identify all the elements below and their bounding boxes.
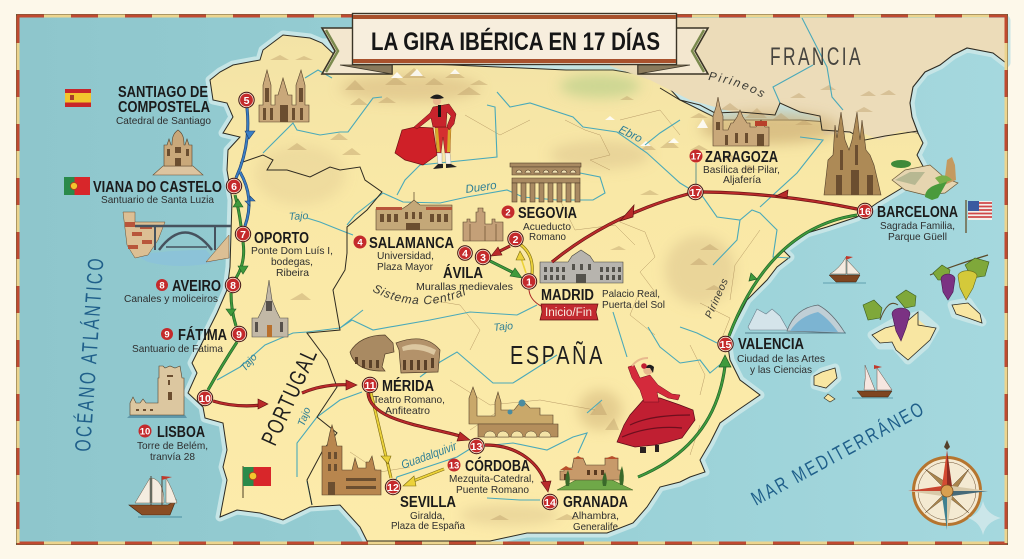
label: Fatima: FÁTIMA	[178, 325, 227, 344]
stop 9: 9	[236, 329, 242, 341]
label: Merida: Anfiteatro	[385, 405, 430, 417]
icon: Seville Giralda and cathedral	[322, 425, 381, 495]
stop 5: 5	[244, 95, 250, 107]
label: Merida: Teatro Romano,	[373, 394, 445, 406]
route: Segovia to Avila	[491, 246, 510, 256]
label: Lisboa: Torre de Belém,	[137, 440, 208, 452]
river label: Tajo north: Tajo	[289, 210, 309, 223]
label: Segovia	[502, 205, 577, 243]
island: Menorca halo	[952, 302, 982, 322]
icon: grapes left	[863, 290, 916, 341]
icon: Park Guell	[891, 157, 958, 200]
stop 4: 4	[462, 248, 468, 260]
route: Santiago to Viana	[236, 108, 255, 178]
route: Fatima to Lisbon	[208, 342, 237, 390]
stop 14	[542, 494, 558, 510]
label: Merida	[373, 376, 445, 417]
route: to Merida	[302, 380, 357, 393]
label: Cordoba	[448, 456, 534, 496]
icon: Fatima basilica	[252, 280, 288, 337]
island: Ibiza halo	[815, 368, 837, 388]
label: Sevilla: SEVILLA	[400, 494, 456, 511]
icon: Santa Luzia sanctuary	[153, 130, 203, 175]
stop 10: 10	[199, 393, 211, 405]
label: Lisboa: LISBOA	[157, 424, 205, 441]
icon: USA flag	[966, 200, 992, 233]
bodice and arms	[628, 365, 680, 402]
range label: Pirineos east: Pirineos	[703, 276, 731, 320]
label: Zaragoza: ZARAGOZA	[705, 149, 778, 166]
icon: Segovia aqueduct	[510, 163, 581, 202]
cape	[395, 127, 437, 165]
range label: Pirineos north: Pirineos	[708, 72, 764, 97]
route: Madrid to Zaragoza	[552, 194, 688, 262]
label: Santiago de Compostela: COMPOSTELA	[118, 99, 210, 116]
label: Zaragoza: Basílica del Pilar,	[703, 164, 780, 176]
label: Segovia: SEGOVIA	[518, 205, 577, 222]
label: Oporto	[251, 230, 333, 279]
icon: grapes right	[930, 255, 989, 300]
stop 7: 7	[240, 229, 246, 241]
label: Aveiro	[124, 278, 221, 305]
country label: España: ESPAÑA	[510, 340, 605, 370]
island: Formentera	[824, 394, 835, 402]
label: Madrid: MADRID	[541, 287, 594, 304]
shoes	[433, 164, 457, 169]
stockings	[437, 153, 451, 164]
stop 8	[225, 277, 241, 293]
border: Portugal and Spain	[240, 155, 382, 505]
label: Santiago de Compostela: Catedral de Santiago	[116, 115, 211, 127]
administrative borders	[350, 110, 760, 472]
label: Fatima	[132, 325, 227, 355]
icon: Zaragoza basilica	[713, 97, 769, 146]
route: green coast north	[233, 195, 243, 226]
route: Barcelona to Valencia	[729, 215, 857, 336]
label: Aveiro: Canales y moliceiros	[124, 293, 218, 305]
label: Valencia: Ciudad de las Artes	[737, 353, 825, 365]
route: Avila to Madrid	[490, 261, 522, 278]
icon: Santiago cathedral	[259, 70, 309, 122]
border: Spain and France	[660, 88, 918, 140]
label: Cordoba: Mezquita-Catedral,	[449, 473, 534, 485]
label: Cordoba: CÓRDOBA	[465, 456, 530, 475]
label: Zaragoza	[690, 149, 780, 186]
route: Cordoba to Seville	[403, 469, 444, 486]
label: Barcelona	[877, 204, 958, 243]
label: Lisboa	[137, 424, 208, 463]
island: Mallorca	[872, 312, 936, 360]
icon: Cordoba mosque and Roman bridge	[469, 387, 558, 437]
icon: flamenco dancer	[617, 358, 695, 453]
terrain shading	[255, 74, 840, 525]
stop 11	[362, 377, 378, 393]
stop 12: 12	[387, 482, 399, 494]
label: Segovia: 2	[505, 208, 511, 218]
label: Cordoba: 13	[449, 460, 459, 472]
stop 7	[235, 226, 251, 242]
label: Granada: Alhambra,	[572, 510, 619, 522]
label: Salamanca: Universidad,	[377, 250, 434, 262]
label: Salamanca	[354, 235, 454, 273]
river label: Tajo Portugal west: Tajo	[238, 351, 260, 374]
stop 3: 3	[480, 252, 486, 264]
trousers	[435, 127, 451, 153]
icon: compass rose	[908, 440, 988, 530]
stop 4	[457, 245, 473, 261]
title: LA GIRA IBÉRICA EN 17 DÍAS	[371, 27, 660, 56]
label: Oporto: OPORTO	[254, 230, 309, 247]
head	[433, 97, 441, 105]
icon: Alhambra	[557, 456, 633, 490]
icon: bullfighter with cape	[395, 94, 457, 169]
stop 13: 13	[471, 441, 482, 453]
rivers	[217, 18, 843, 505]
stop markers	[197, 92, 873, 510]
route: Zaragoza to Barcelona	[703, 190, 857, 209]
stop 14: 14	[544, 497, 556, 509]
route: Viana to Oporto	[240, 172, 255, 226]
label: Avila: ÁVILA	[443, 263, 483, 282]
stop 6	[226, 178, 242, 194]
stop 2: 2	[513, 234, 519, 246]
label: Granada: GRANADA	[563, 494, 628, 511]
river label: Ebro: Ebro	[617, 124, 644, 146]
stop 17: 17	[690, 187, 701, 199]
stop 2	[507, 231, 524, 247]
label: Lisboa: tranvía 28	[150, 451, 195, 463]
label: Salamanca: SALAMANCA	[369, 235, 454, 252]
island: Menorca	[952, 303, 982, 323]
label: Lisboa: 10	[140, 426, 150, 438]
label: Oporto: Ribeira	[276, 267, 309, 279]
shoes	[640, 445, 659, 453]
label: Barcelona: Sagrada Familia,	[880, 220, 955, 232]
route: Valencia to south	[638, 355, 731, 477]
label: Salamanca: 4	[357, 238, 363, 248]
route: Merida to Cordoba	[368, 393, 470, 441]
routes	[208, 108, 857, 492]
icon: Sagrada Familia	[824, 112, 881, 195]
land: Iberian peninsula	[188, 35, 925, 541]
label: Madrid: Puerta del Sol	[602, 299, 665, 311]
label: Valencia	[737, 336, 825, 376]
stop 5	[238, 92, 255, 108]
label: Segovia: Acueducto	[523, 221, 571, 233]
stop 10	[197, 390, 213, 406]
label: Segovia: Romano	[529, 231, 566, 243]
label: Barcelona: Parque Güell	[888, 231, 947, 243]
stop 8: 8	[230, 280, 236, 292]
icon: Spain flag	[65, 89, 91, 107]
label: Salamanca: Plaza Mayor	[377, 261, 433, 273]
stop 15	[717, 336, 734, 352]
label: Zaragoza: 17	[691, 152, 701, 162]
label: Viana do Castelo: VIANA DO CASTELO	[93, 179, 222, 196]
label: Merida: MÉRIDA	[382, 376, 434, 395]
label: Avila: Murallas medievales	[416, 281, 513, 293]
sea label: Oceano Atlantico: OCÉANO ATLÁNTICO	[70, 255, 109, 452]
island: Ibiza	[814, 368, 837, 388]
label: Granada	[563, 494, 628, 533]
title banner	[322, 14, 708, 74]
range label: Sistema Central: Sistema Central	[373, 285, 465, 304]
tie	[438, 105, 441, 117]
label: Santiago de Compostela	[116, 84, 211, 127]
label: Aveiro: AVEIRO	[172, 278, 221, 295]
coastal halo	[188, 20, 1006, 540]
label: Madrid	[540, 287, 665, 320]
stop 12	[385, 479, 401, 495]
route: Madrid to Segovia	[516, 245, 532, 274]
stop 3	[475, 249, 491, 265]
banner plate	[352, 14, 676, 64]
label: Avila	[416, 263, 513, 293]
route: Aveiro to Fatima	[226, 293, 236, 326]
right ribbon tail	[638, 28, 708, 74]
icon: Merida theatre	[350, 335, 440, 373]
route: Cordoba to Granada	[485, 445, 551, 492]
icon: sparkle star	[968, 501, 1001, 535]
France coast line	[910, 48, 1006, 133]
icon: Salamanca university	[376, 192, 452, 230]
stop 1: 1	[526, 276, 532, 288]
river label: Guadalquivir: Guadalquivir	[399, 439, 459, 472]
stop 6: 6	[231, 181, 237, 193]
land: France	[600, 18, 1006, 140]
label: Madrid: Palacio Real,	[602, 288, 660, 300]
river and range labels	[238, 72, 764, 472]
label: Fatima: Santuario de Fátima	[132, 343, 223, 355]
icon: sailing ship	[129, 476, 182, 517]
ribbon folds	[340, 65, 690, 74]
stop 1	[521, 273, 537, 290]
island halos	[872, 315, 935, 360]
islands: Balearics	[814, 302, 982, 402]
label: Barcelona: BARCELONA	[877, 204, 958, 221]
river label: Tajo Madrid: Tajo	[493, 320, 514, 334]
label: Oporto: bodegas,	[271, 256, 313, 268]
river label: Duero: Duero	[465, 180, 498, 196]
route: Merida to Seville	[371, 393, 391, 478]
skirt	[617, 398, 695, 447]
label: Aveiro: 8	[159, 280, 165, 292]
stop 13	[468, 438, 485, 454]
river label: Tajo Portugal east: Tajo	[296, 405, 314, 428]
label: Fatima: 9	[164, 330, 170, 340]
label: Zaragoza: Aljafería	[723, 174, 761, 186]
label: Oporto: Ponte Dom Luís I,	[251, 245, 333, 257]
country label: Francia: FRANCIA	[770, 43, 863, 71]
line: Madrid stop to ribbon	[529, 290, 541, 306]
label: Valencia: y las Ciencias	[750, 364, 812, 376]
jacket and arms	[414, 104, 456, 130]
icon: Portugal flag left	[64, 177, 90, 195]
label: Santiago de Compostela: SANTIAGO DE	[118, 84, 208, 101]
label: Valencia: VALENCIA	[738, 336, 804, 353]
stop 16	[857, 203, 873, 219]
route: Oporto to Aveiro	[236, 242, 248, 278]
label: Viana do Castelo	[93, 179, 222, 206]
route: Lisbon east	[213, 399, 268, 409]
icon: City of Arts and Sciences	[745, 305, 846, 333]
stop 15: 15	[720, 339, 731, 351]
label: Cordoba: Puente Romano	[456, 484, 529, 496]
icon: Ponte Dom Luis bridge, Oporto	[123, 212, 231, 266]
icon: small boat	[823, 256, 866, 283]
label: Sevilla: Plaza de España	[391, 520, 465, 532]
icon: Madrid royal palace	[540, 250, 623, 283]
label: Viana do Castelo: Santuario de Santa Luzia	[101, 194, 214, 206]
label: Granada: Generalife	[573, 521, 618, 533]
label: Madrid: Inicio/Fin	[545, 307, 592, 319]
stop 9	[231, 326, 247, 342]
left ribbon tail	[322, 28, 392, 74]
icon: Portugal flag on map	[243, 466, 271, 498]
label: Sevilla: Giralda,	[410, 510, 445, 522]
icon: boat near Ibiza	[852, 365, 893, 398]
mountain textures	[270, 55, 896, 520]
line: Zaragoza label connector	[695, 163, 697, 184]
icon: Belem tower	[127, 366, 187, 418]
stop 16: 16	[859, 206, 871, 218]
stop 11: 11	[364, 380, 376, 392]
stop 17	[687, 184, 704, 200]
icon: Avila walls	[463, 208, 503, 241]
country label: Portugal: PORTUGAL	[256, 344, 323, 449]
head	[643, 365, 653, 375]
sea label: Mar Mediterraneo: MAR MEDITERRÁNEO	[747, 397, 929, 510]
label: Sevilla	[391, 494, 465, 532]
